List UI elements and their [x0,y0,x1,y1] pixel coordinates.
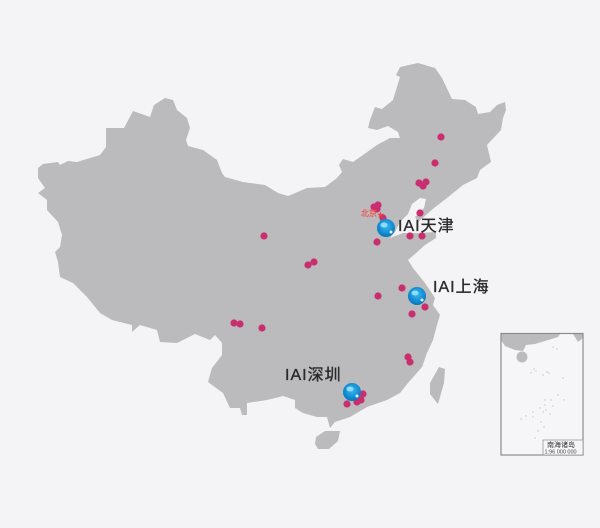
pin: Shenzhen [343,383,361,401]
pin: Shanghai [408,287,426,305]
inset caption [543,440,583,456]
map of China [38,63,506,449]
inset islands [520,346,565,439]
label: IAI Tianjin: IAI天津 [398,217,455,235]
Hainan [315,431,340,449]
Beijing label [361,208,384,219]
pin: Tianjin [377,219,395,237]
inset caption: 1:96 000 000 [544,450,577,456]
inset frame [501,334,583,455]
inset: South China Sea [501,334,583,456]
Beijing label: ★ [377,211,384,219]
inset caption: 南海诸岛 [547,440,575,449]
Beijing label: 北京 [361,208,377,218]
label: IAI Shanghai: IAI上海 [433,278,490,296]
Taiwan [430,367,445,404]
mainland [38,63,506,428]
label: IAI Shenzhen: IAI深圳 [285,366,342,384]
inset land [501,334,560,351]
city dots [230,133,445,408]
